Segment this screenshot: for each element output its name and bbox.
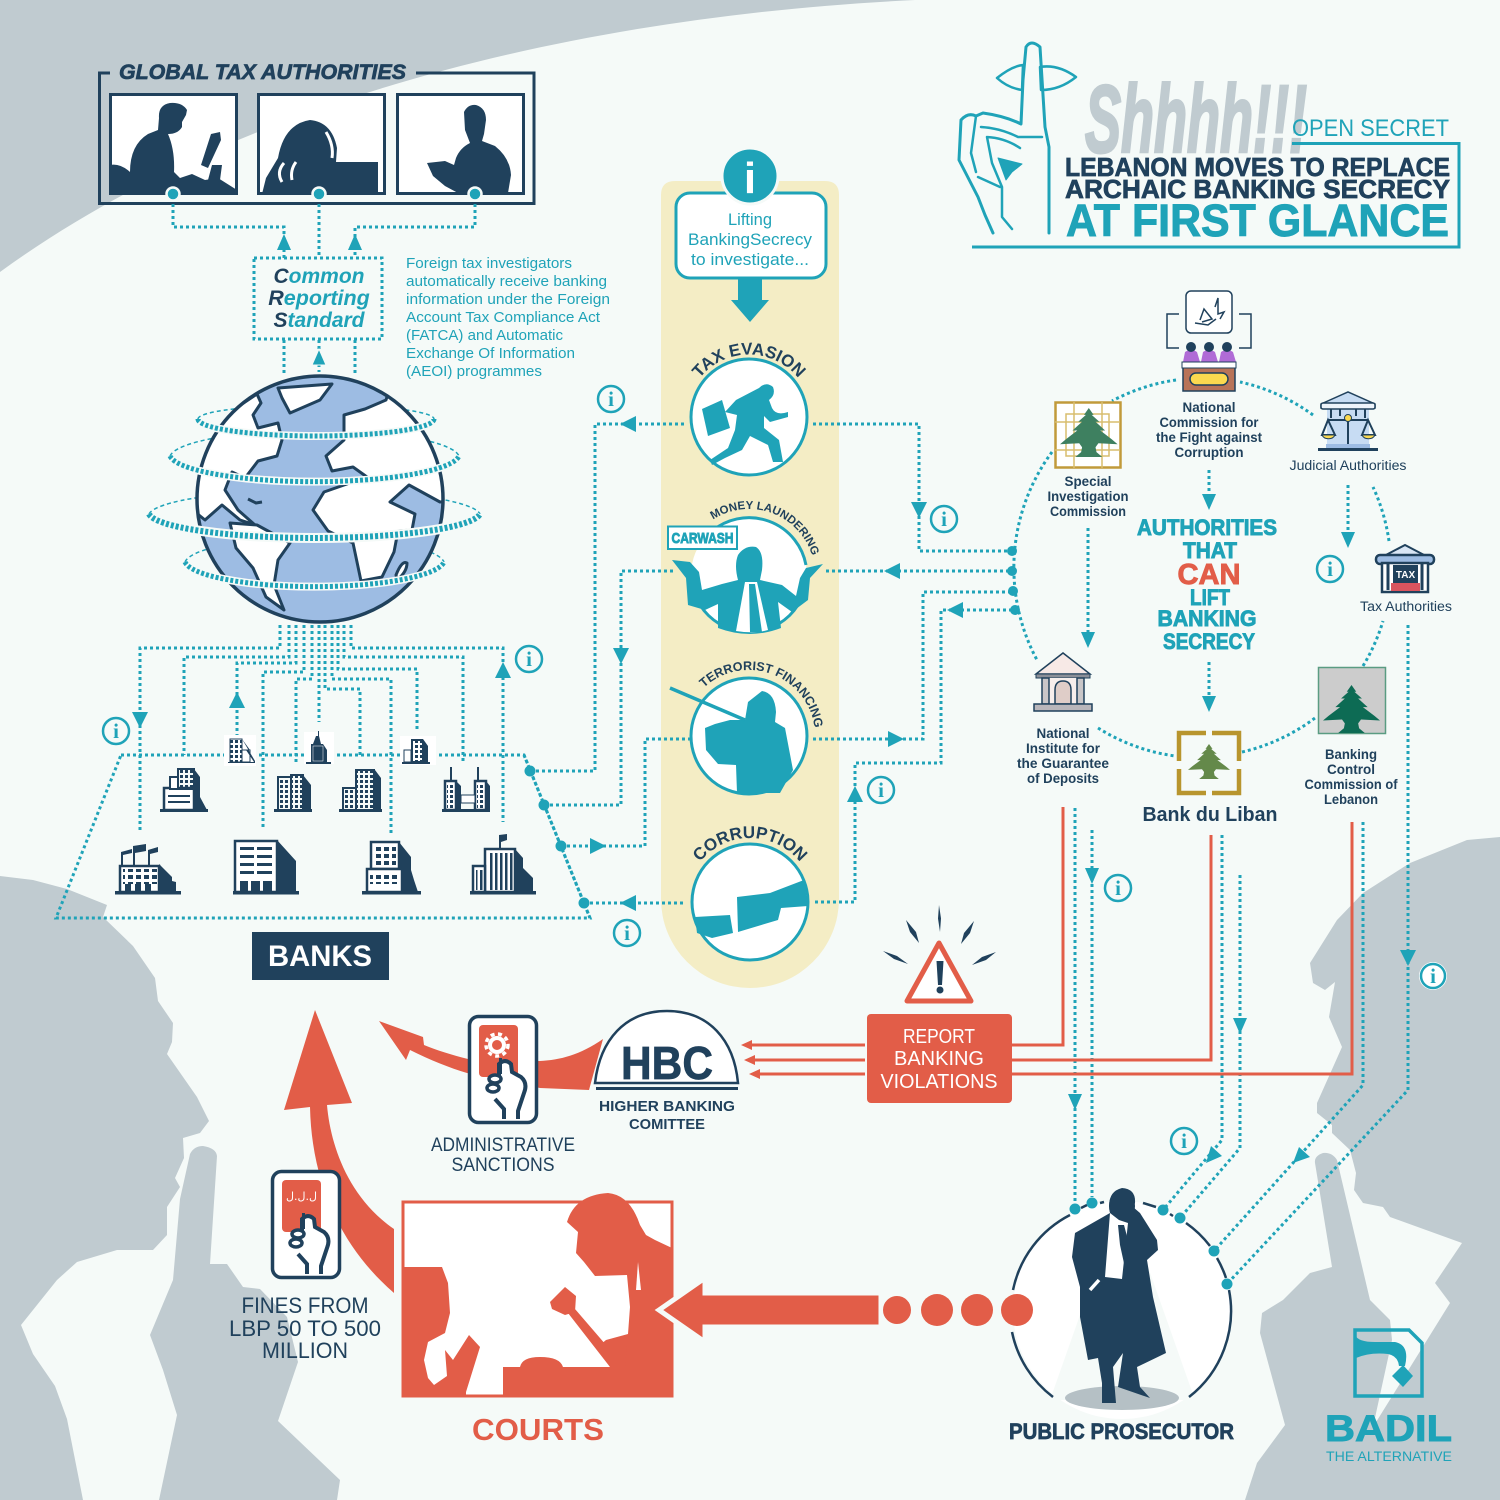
heading: authorities that can lift banking secrecy: SECRECY [1163,629,1255,654]
background silhouette: left head [0,876,209,1500]
label: National [1182,400,1236,415]
text: FATCA explanation: information under the Foreign [406,291,610,308]
banks trapezoid outline [56,755,590,918]
box: common reporting standard: Common [274,265,364,288]
building medium 2 [274,775,312,812]
text: FATCA explanation: Exchange Of Information [406,345,575,362]
heading: authorities that can lift banking secrecy: AUTHORITIES [1137,515,1277,540]
node: terrorist financing: TERRORIST FINANCING [698,661,822,727]
text: administrative sanctions: SANCTIONS [452,1155,554,1176]
kicker: OPEN SECRET [1292,115,1449,142]
shhhh script: Shhhh!!! [1085,66,1307,173]
info badge [931,506,957,532]
title block: ARCHAIC BANKING SECRECY [1065,174,1450,204]
building large 3 [362,842,421,894]
chart: globe with data rings [149,376,480,622]
connectors: authorities center arrows [1081,470,1216,712]
info badge: i [941,507,947,531]
panel: lifting banking secrecy column [661,181,839,988]
info badge: i [878,778,884,802]
box: common reporting standard [254,258,382,339]
text: FATCA explanation: (AEOI) programmes [406,363,542,380]
title block: AT FIRST GLANCE [1066,195,1449,246]
connectors: causes to authorities [813,424,1015,902]
icons: info badges [103,386,1447,1154]
info badge [868,777,894,803]
label: the Guarantee [1017,756,1109,771]
box: common reporting standard: Standard [273,309,366,332]
icon: info badge [722,148,778,204]
label [1048,474,1128,519]
authority: tax authorities: TAX [1396,570,1415,581]
building medium 4 [442,767,490,812]
title frame [972,144,1459,247]
building large 1 [115,844,181,894]
label: Commission for [1160,415,1259,430]
logo: badil [1325,1330,1452,1464]
text: fines [229,1293,381,1363]
label [1156,400,1262,460]
panel: global tax authorities [100,61,534,204]
label: Control [1327,762,1375,777]
node: higher banking committee [595,1011,738,1133]
label [1017,726,1109,786]
carwash sign: CARWASH [672,530,734,547]
rings front [149,419,480,587]
info badge: i [1327,557,1333,581]
connectors: authorities to prosecutor [1068,625,1416,1284]
info badge [103,718,129,744]
logo: badil: THE ALTERNATIVE [1326,1449,1452,1464]
node: tax evasion: TAX EVASION [691,342,806,378]
connector dots [166,188,482,200]
node: higher banking committee: HBC [621,1037,713,1089]
heading: authorities that can lift banking secrecy: THAT [1183,538,1238,563]
text: FATCA explanation: Foreign tax investigators [406,255,572,272]
label [1304,747,1398,807]
node: higher banking committee: COMITTEE [629,1116,705,1133]
arrow: down to causes [731,279,769,322]
node: tax evasion [690,342,808,476]
text: administrative sanctions: ADMINISTRATIVE [431,1135,575,1156]
heading: authorities that can lift banking secrecy: LIFT [1190,585,1230,610]
text: administrative sanctions [431,1135,575,1176]
logo: badil: BADIL [1325,1408,1452,1449]
label: Judicial Authorities [1290,458,1407,473]
label: Lebanon [1324,792,1378,807]
arrow: prosecutor to courts [659,1278,913,1342]
box: report banking violations [867,1014,1012,1103]
authority: bank du liban [1142,733,1278,826]
callout: lifting banking secrecy [676,148,826,278]
building large 2 [233,840,299,894]
connectors: banks to causes [524,416,690,918]
building small 1 [224,735,256,766]
node: corruption [690,826,810,962]
screen: woman with headset [258,94,384,194]
info badge [1171,1128,1197,1154]
screen: man at computer [110,94,237,194]
info badge: i [1430,964,1436,988]
rings back [149,405,480,562]
label: of Deposits [1027,771,1099,786]
label: Institute for [1026,741,1101,756]
text: FATCA explanation: (FATCA) and Automatic [406,327,563,344]
info badge: i [113,719,119,743]
node: money laundering [667,501,823,634]
connectors: authorities to standard [173,204,475,258]
info badge [598,386,624,412]
heading: authorities that can lift banking secrecy: CAN [1178,559,1240,591]
icon: commission [1167,291,1251,391]
label: Investigation [1048,489,1128,504]
label: Commission of [1304,777,1398,792]
frame [100,73,534,204]
banks label [252,932,389,980]
connectors: red report lines [741,807,1352,1079]
building medium 1 [160,769,208,812]
heading: authorities that can lift banking secrecy [1137,515,1277,654]
authority: judicial authorities [1290,392,1407,473]
info badge [1105,875,1131,901]
node: money laundering: MONEY LAUNDERING [710,501,819,555]
info badge [1419,962,1447,990]
woman judge [503,1193,672,1397]
label: National [1036,726,1090,741]
authority: special investigation commission [1048,402,1128,519]
headline: LEBANON MOVES TO REPLACE [1065,152,1450,182]
text: fines: MILLION [262,1338,348,1363]
info badge: i [1181,1129,1187,1153]
banks label: BANKS [268,940,372,973]
diagram: authorities ring [1007,380,1389,756]
text: FATCA explanation: Account Tax Compliance Act [406,309,601,326]
connectors: globe to banks [132,625,511,835]
panel: courts [402,1193,672,1397]
node: corruption: CORRUPTION [694,826,808,862]
authority: banking control commission [1304,668,1398,807]
icon: fines card [272,1172,340,1278]
arrow: HBC to sanctions [379,1021,603,1090]
screen: man reading [398,94,524,194]
building small 3 [400,736,436,765]
info badge: i [526,647,532,671]
icons: banks buildings [115,731,536,894]
label: courts: COURTS [472,1412,604,1447]
text: FATCA explanation: automatically receive banking [406,273,607,290]
icon: cedar [1060,408,1118,457]
info badge [614,920,640,946]
text: fines: FINES FROM [242,1293,368,1318]
dots [881,1294,913,1326]
background silhouette: right head [1245,837,1500,1500]
info badge [1317,556,1343,582]
callout: lifting banking secrecy: BankingSecrecy [688,231,813,249]
callout: lifting banking secrecy: to investigate... [691,251,809,269]
connectors: globe to standard [284,340,355,375]
icon: administrative sanctions card [470,1016,536,1122]
connector dots [921,1198,1232,1326]
text: fines: LBP 50 TO 500 [229,1316,381,1341]
title block [959,43,1459,247]
info badge: i [608,387,614,411]
node: public prosecutor [1009,1188,1234,1444]
icon: warning triangle [883,905,996,1001]
authority: tax authorities [1360,545,1452,614]
gavel [550,1287,627,1367]
box: report banking violations: BANKING [894,1048,984,1070]
info badge: i [1115,876,1121,900]
carwash sign [668,526,737,549]
background shape: top-left grey swoosh [0,0,915,272]
box: common reporting standard: Reporting [268,286,370,310]
label: Tax Authorities [1360,599,1452,614]
box: report banking violations: VIOLATIONS [880,1071,998,1093]
icon: cedar [1188,744,1230,779]
node: terrorist financing [669,661,822,796]
node: higher banking committee: HIGHER BANKING [599,1098,735,1115]
authority: national institute for guarantee of deposits [1017,653,1109,786]
info badge [516,646,542,672]
icon: cedar [1323,685,1380,733]
building medium 3 [339,770,382,812]
arrow: courts up to banks [284,1010,394,1293]
icon: fines card: ل.ل.ل [286,1190,317,1203]
heading: global tax authorities: GLOBAL TAX AUTHORITIES [119,61,406,84]
label: Banking [1325,747,1377,762]
heading: authorities that can lift banking secrecy: BANKING [1158,606,1256,631]
info badge: i [624,921,630,945]
connector: judicial to tax [1341,485,1355,548]
hand icon [959,43,1076,233]
label: Special [1064,474,1112,489]
background silhouette: left hand [150,1146,340,1500]
text: FATCA explanation [406,255,610,380]
defendant [402,1267,480,1397]
spotlight circle [1013,1201,1231,1419]
label: Bank du Liban [1142,804,1278,826]
icon: info badge: i [744,154,756,203]
callout: lifting banking secrecy: Lifting [728,211,772,229]
globe sphere [197,376,443,622]
building small 2 [304,731,334,764]
authority: national commission [1156,291,1262,460]
label: Corruption [1174,445,1244,460]
building large 4 [470,834,536,894]
label: PUBLIC PROSECUTOR [1009,1419,1234,1444]
label: Commission [1050,504,1126,519]
label: the Fight against [1156,430,1262,445]
box: report banking violations: REPORT [903,1026,975,1048]
